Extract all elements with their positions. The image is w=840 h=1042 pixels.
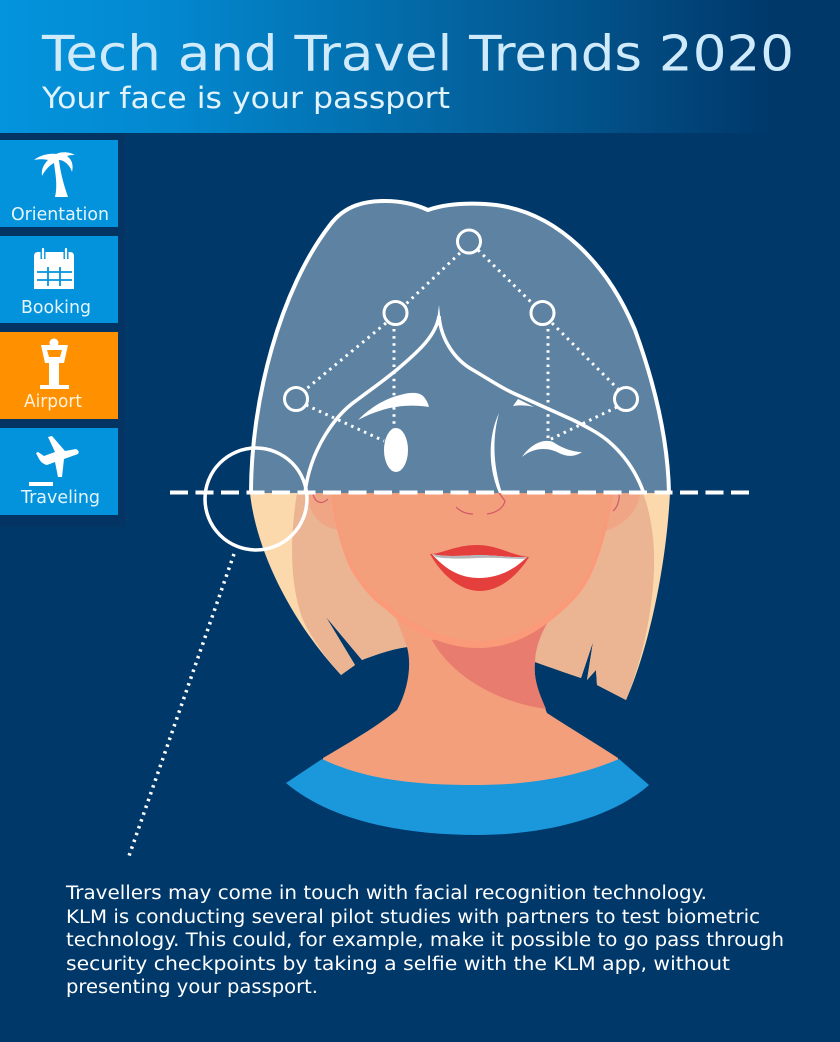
nav: Traveling — [0, 428, 118, 515]
description text: Travellers may come in touch with facial recognition technology. — [65, 883, 707, 904]
hair upper: scan overlay — [251, 201, 669, 493]
eyebrows and eyes — [358, 393, 582, 493]
hair lower — [250, 493, 670, 700]
description text — [65, 883, 784, 998]
neck — [322, 620, 619, 800]
illustration: woman's face — [250, 201, 670, 835]
nav: Airport — [0, 332, 118, 419]
subtitle: Your face is your passport — [41, 81, 450, 115]
title: Tech and Travel Trends 2020 — [41, 26, 794, 82]
face — [331, 493, 613, 648]
callout magnifier circle — [205, 448, 307, 550]
description text: security checkpoints by taking a selfie with the KLM app, without — [66, 954, 730, 975]
neck shadow — [432, 622, 548, 709]
fringe outline — [305, 305, 643, 493]
header banner — [0, 0, 840, 133]
nav: Traveling: Traveling — [20, 487, 100, 508]
nav: Booking: Booking — [21, 297, 91, 318]
dotted links — [305, 250, 618, 441]
callout dotted leader — [129, 554, 234, 856]
icon: control tower — [40, 338, 69, 389]
icon: airplane — [29, 436, 79, 486]
nav: Orientation — [0, 140, 118, 227]
facial recognition network — [284, 230, 638, 441]
ears — [306, 493, 640, 532]
icon: palm tree — [34, 152, 75, 197]
description text: KLM is conducting several pilot studies with partners to test biometric — [66, 907, 760, 928]
shirt — [286, 759, 649, 835]
nav: Orientation: Orientation — [11, 204, 109, 225]
description text: presenting your passport. — [66, 977, 318, 998]
hair outline — [251, 201, 669, 493]
icon: calendar — [34, 248, 74, 289]
ear and nose lines — [313, 493, 619, 514]
nodes — [284, 230, 638, 410]
nav: Booking — [0, 236, 118, 323]
sidebar navigation — [0, 133, 125, 527]
hair lower shade — [292, 493, 654, 700]
nav: Airport: Airport — [24, 391, 82, 412]
dashed scan line — [170, 490, 750, 494]
description text: technology. This could, for example, make it possible to go pass through — [66, 930, 784, 951]
mouth — [430, 545, 529, 591]
